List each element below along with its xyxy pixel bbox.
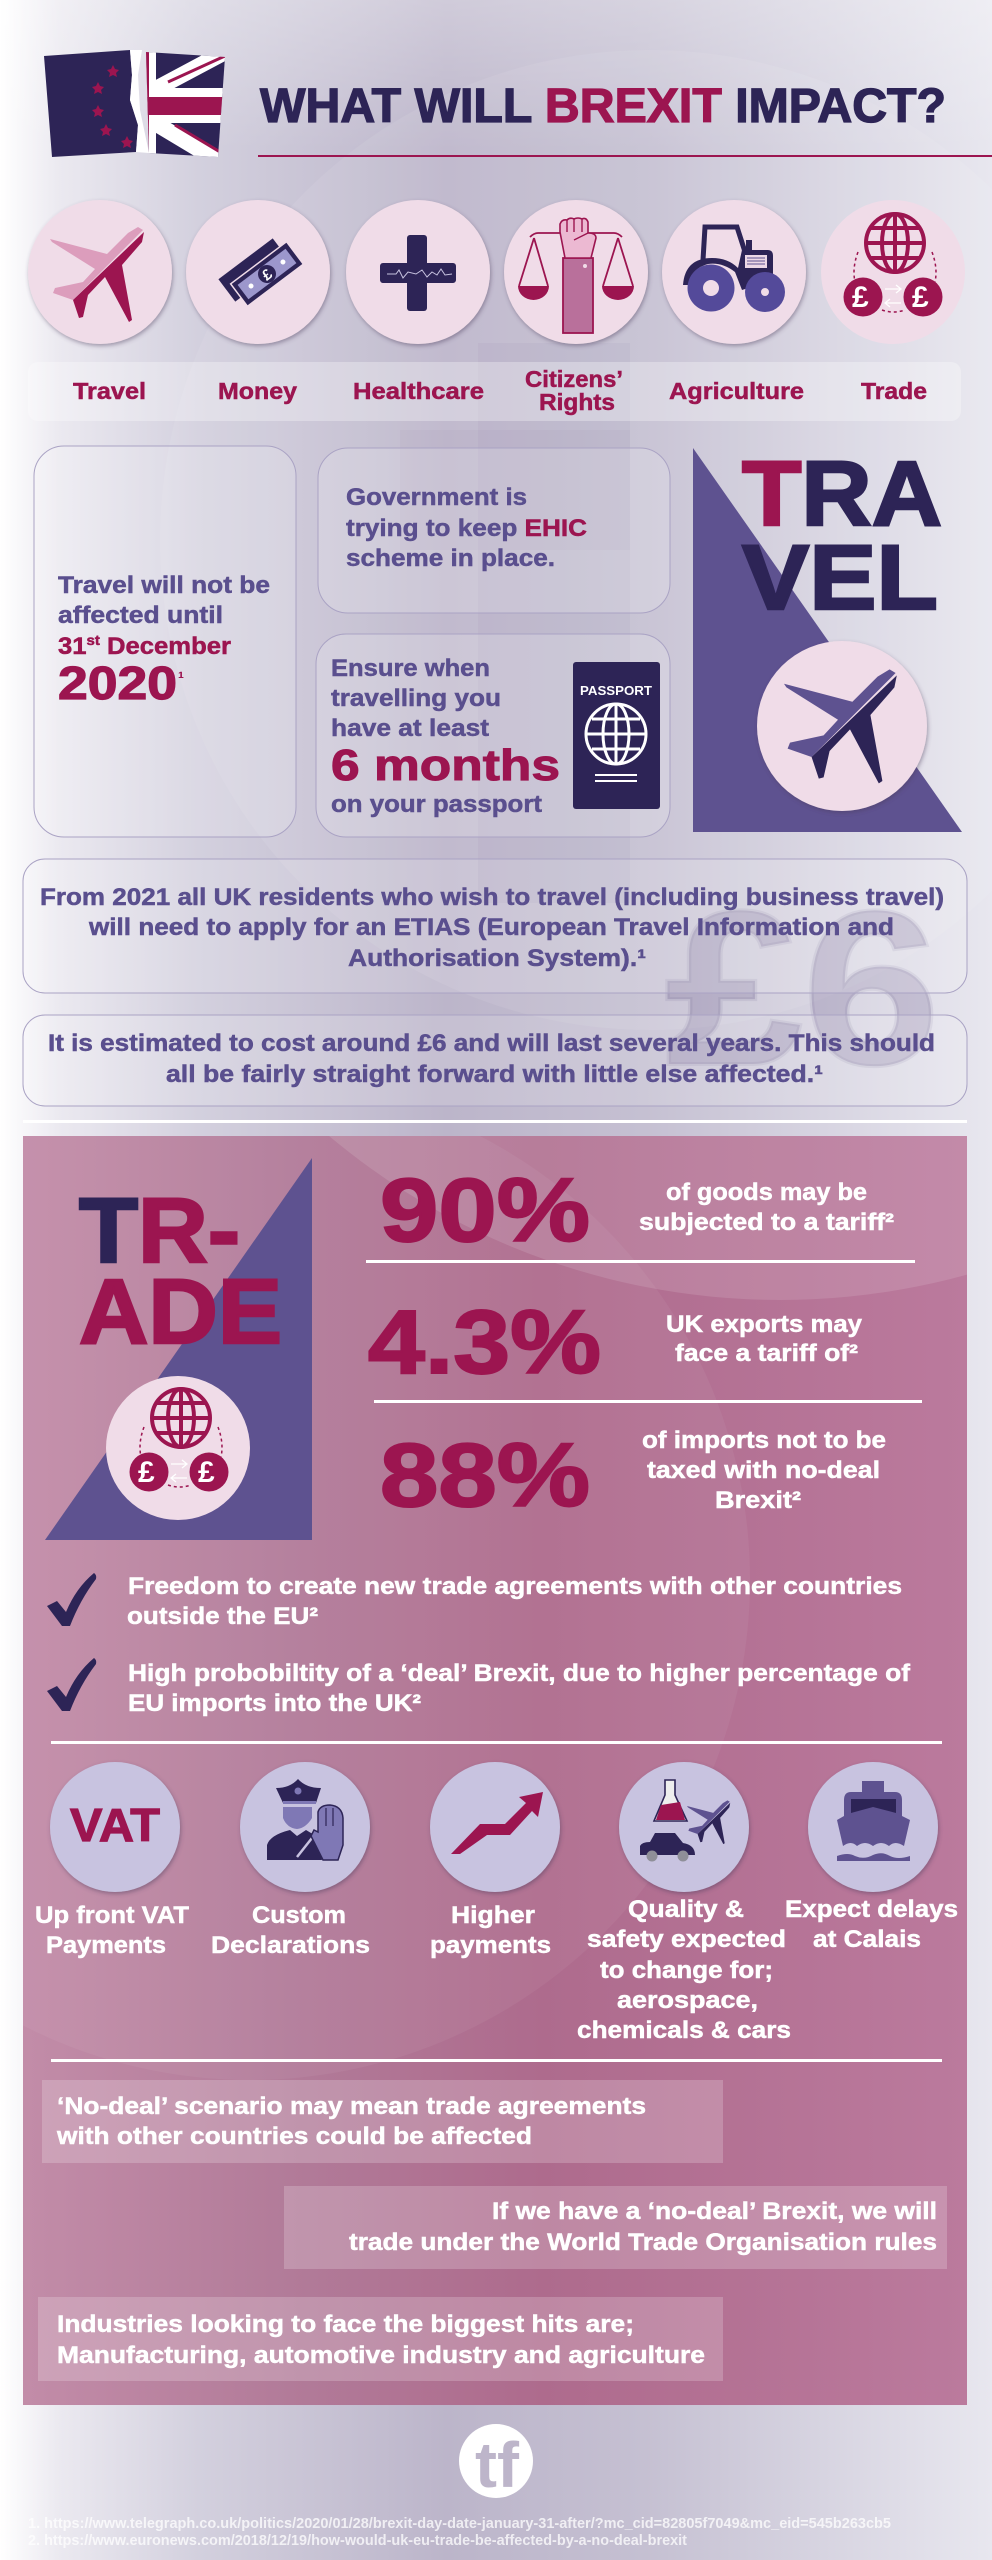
panel: EHIC scheme: Government is	[346, 484, 527, 511]
topic icon: citizens rights	[504, 200, 648, 344]
stat: 90 percent: 90%	[380, 1161, 590, 1261]
sources	[28, 2516, 891, 2549]
item: higher payments	[430, 1762, 560, 1959]
item: up front VAT payments: VAT	[70, 1799, 160, 1851]
item: custom declarations: Declarations	[211, 1932, 370, 1959]
item: quality and safety: Quality &	[628, 1896, 744, 1923]
item: quality and safety: aerospace,	[617, 1987, 758, 2014]
topic labels bar: Healthcare	[353, 378, 484, 404]
item: delays at Calais	[785, 1762, 958, 1953]
item: delays at Calais: at Calais	[813, 1926, 921, 1953]
panel: travel date: affected until	[58, 602, 223, 629]
item: quality and safety: chemicals & cars	[577, 2017, 791, 2044]
item: custom declarations: Custom	[252, 1902, 346, 1929]
panel: ETIAS cost	[23, 1015, 967, 1106]
topic icon: travel	[28, 200, 172, 344]
topic labels bar: Money	[218, 378, 297, 404]
panel: passport validity: have at least	[331, 715, 489, 742]
panel: ETIAS application: From 2021 all UK residents who wish to travel (including business travel)	[40, 884, 944, 911]
panel: travel date: 2020	[58, 657, 177, 709]
panel: travel date: ¹	[178, 668, 184, 688]
watermark: pound six: £6	[665, 865, 940, 1111]
stat: 4.3 percent: UK exports may	[666, 1311, 863, 1338]
topic icon: trade	[821, 200, 965, 344]
topic labels bar: Rights	[539, 389, 615, 415]
heading: trade with triangle and icon	[45, 1158, 312, 1540]
panel: EHIC scheme	[318, 448, 670, 613]
topic labels bar: Citizens’	[525, 366, 623, 392]
panel: EHIC scheme: trying to keep EHIC	[346, 515, 587, 542]
item: higher payments: payments	[430, 1932, 551, 1959]
heading: travel with triangle and plane: VEL	[742, 527, 938, 629]
heading: trade with triangle and icon: ADE	[79, 1261, 282, 1363]
logo: tf: tf	[475, 2429, 520, 2501]
item: up front VAT payments: Payments	[46, 1932, 166, 1959]
panel: travel date: st	[87, 632, 100, 648]
stat: 88 percent: 88%	[380, 1426, 590, 1526]
stat: 90 percent: subjected to a tariff²	[639, 1209, 894, 1236]
icon: passport	[573, 662, 660, 809]
stat: 88 percent: taxed with no-deal	[647, 1457, 880, 1484]
panel: passport validity: Ensure when	[331, 655, 490, 682]
panel: travel date: Travel will not be	[58, 572, 270, 599]
panel: ETIAS application: will need to apply for an ETIAS (European Travel Information and	[88, 914, 894, 941]
stat: 4.3 percent: 4.3%	[368, 1293, 601, 1393]
panel: travel date: December	[100, 633, 231, 660]
stat: 4.3 percent	[368, 1293, 922, 1403]
panel: ETIAS application: Authorisation System).¹	[348, 945, 646, 972]
checklist item: deal Brexit probability: High probobiltity of a ‘deal’ Brexit, due to higher percentage of	[128, 1660, 911, 1687]
logo: tf	[459, 2424, 533, 2501]
panel: ETIAS application	[23, 859, 967, 993]
checklist item: new trade agreements	[47, 1573, 902, 1630]
topic labels bar: Agriculture	[669, 378, 804, 404]
panel: ETIAS cost: all be fairly straight forward with little else affected.¹	[166, 1061, 823, 1088]
heading: travel with triangle and plane	[693, 443, 962, 832]
stat: 88 percent	[380, 1426, 886, 1526]
panel: EHIC scheme: scheme in place.	[346, 545, 555, 572]
topic icon: trade: £	[852, 281, 869, 314]
title: WHAT WILL BREXIT IMPACT?	[260, 80, 946, 133]
panel: travel date	[34, 446, 296, 837]
topic icon: agriculture	[662, 200, 806, 344]
item: up front VAT payments: Up front VAT	[35, 1902, 189, 1929]
icon: passport: PASSPORT	[580, 683, 652, 698]
topic icon: trade: £	[912, 281, 929, 314]
note: no-deal trade agreements: with other countries could be affected	[56, 2123, 532, 2150]
item: delays at Calais: Expect delays	[785, 1896, 958, 1923]
checklist item: deal Brexit probability: EU imports into the UK²	[128, 1690, 421, 1717]
topic labels bar: Travel	[73, 378, 146, 404]
panel: passport validity	[316, 634, 670, 837]
stat: 4.3 percent: face a tariff of²	[675, 1340, 858, 1367]
item: up front VAT payments	[35, 1762, 189, 1959]
topic labels bar	[28, 362, 961, 421]
checklist item: deal Brexit probability	[47, 1658, 911, 1717]
note: biggest hits	[38, 2297, 723, 2381]
topic icon: healthcare	[346, 200, 490, 344]
panel: passport validity: 6 months	[331, 741, 560, 790]
item: quality and safety: to change for;	[600, 1957, 773, 1984]
item: quality and safety	[577, 1762, 791, 2044]
panel: travel date: 31	[58, 633, 85, 660]
item: higher payments: Higher	[451, 1902, 535, 1929]
stat: 90 percent	[366, 1161, 915, 1263]
panel: passport validity: on your passport	[331, 791, 542, 818]
checklist item: new trade agreements: Freedom to create new trade agreements with other countries	[128, 1573, 902, 1600]
stat: 90 percent: of goods may be	[666, 1179, 867, 1206]
item: quality and safety: safety expected	[587, 1926, 786, 1953]
sources: 1. https://www.telegraph.co.uk/politics/2020/01/28/brexit-day-date-january-31-after/?mc_cid=82805f7049&mc_eid=545b263cb5	[28, 2516, 891, 2532]
note: biggest hits: Manufacturing, automotive industry and agriculture	[57, 2342, 705, 2369]
panel: trade background	[23, 1136, 967, 2405]
heading: trade with triangle and icon: TR-	[79, 1180, 240, 1282]
heading: travel with triangle and plane: TRA	[742, 443, 942, 545]
note: biggest hits: Industries looking to face the biggest hits are;	[57, 2311, 634, 2338]
heading: trade with triangle and icon: £	[198, 1456, 215, 1489]
topic labels bar: Trade	[861, 378, 927, 404]
panel: passport validity: travelling you	[331, 685, 501, 712]
note: no-deal trade agreements	[42, 2080, 723, 2163]
stat: 88 percent: Brexit²	[715, 1487, 801, 1514]
panel: ETIAS cost: It is estimated to cost around £6 and will last several years. This should	[48, 1030, 935, 1057]
note: WTO rules	[284, 2186, 947, 2269]
topic icon: money: £	[259, 265, 276, 284]
sources: 2. https://www.euronews.com/2018/12/19/how-would-uk-eu-trade-be-affected-by-a-no-deal-brexit	[28, 2533, 687, 2549]
flag: torn EU and UK flag	[44, 50, 230, 165]
heading: trade with triangle and icon: £	[138, 1456, 155, 1489]
topic icon: money	[186, 200, 330, 344]
item: custom declarations	[211, 1762, 370, 1959]
note: no-deal trade agreements: ‘No-deal’ scenario may mean trade agreements	[57, 2093, 646, 2120]
checklist item: new trade agreements: outside the EU²	[127, 1603, 318, 1630]
note: WTO rules: trade under the World Trade Organisation rules	[349, 2229, 937, 2256]
note: WTO rules: If we have a ‘no-deal’ Brexit, we will	[492, 2198, 937, 2225]
stat: 88 percent: of imports not to be	[642, 1427, 886, 1454]
